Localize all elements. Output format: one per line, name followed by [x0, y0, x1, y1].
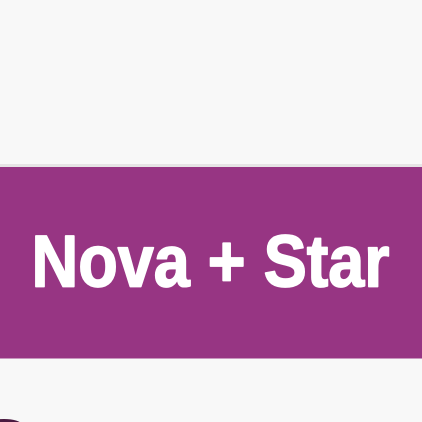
panel: title banner: [0, 167, 422, 358]
cropped shape at bottom edge: [0, 419, 21, 422]
